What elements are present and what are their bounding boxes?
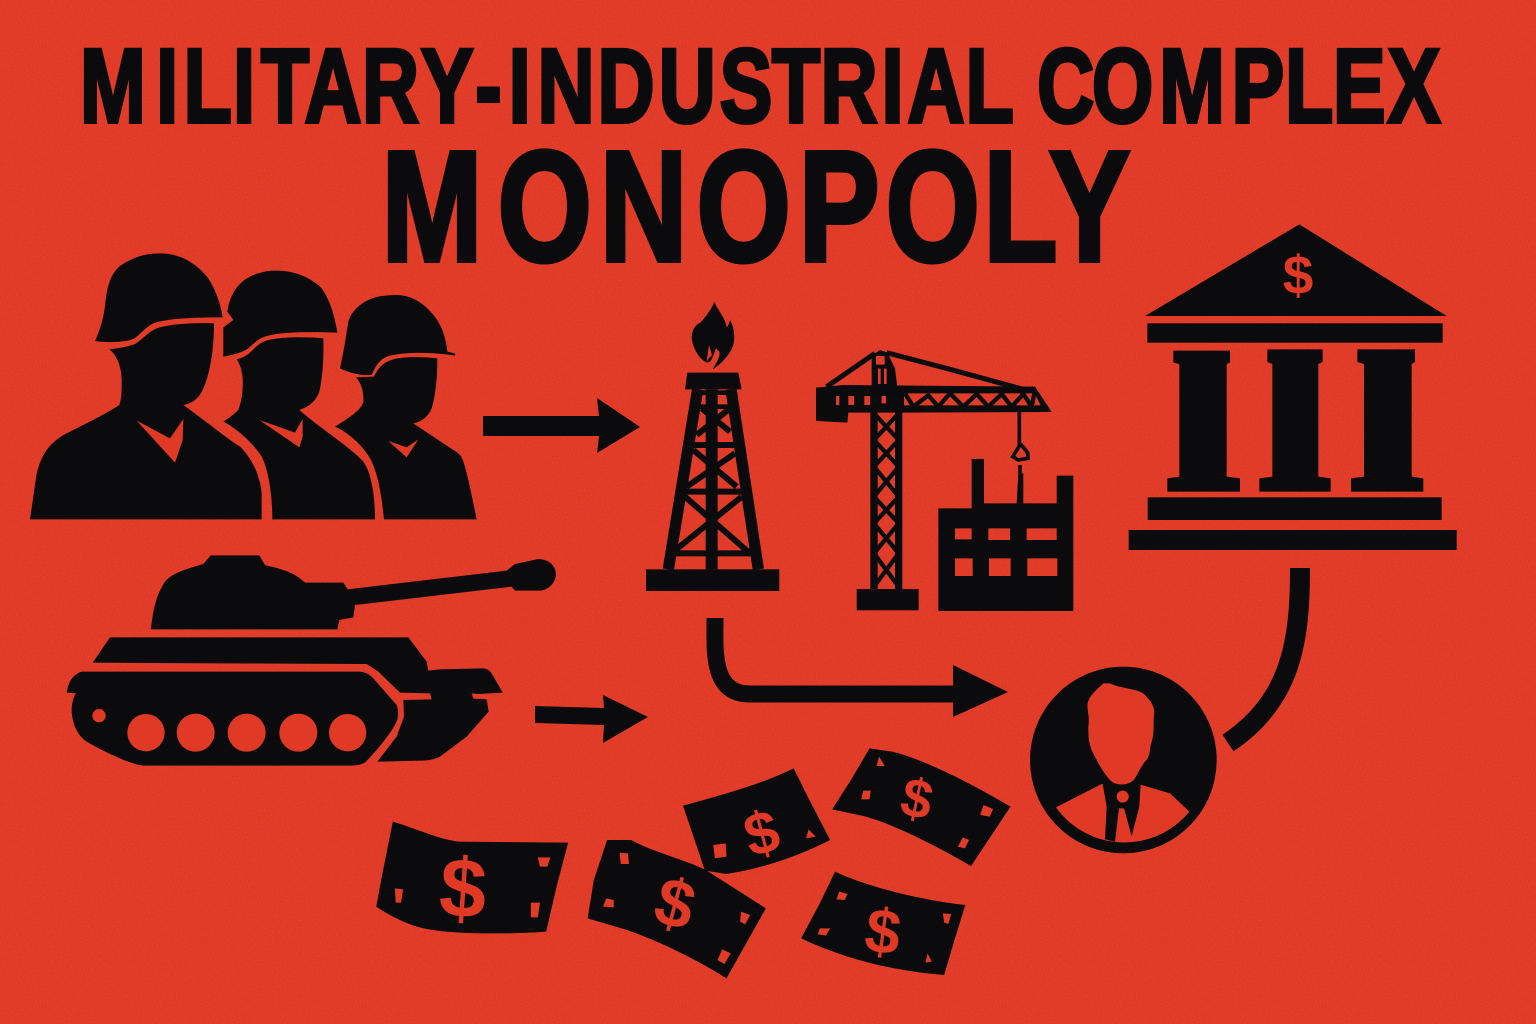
- banknote 2: $: [647, 862, 703, 945]
- bank pediment: [1145, 224, 1447, 316]
- derrick base: [646, 569, 779, 591]
- banknote 5: [801, 872, 965, 975]
- derrick cap: [685, 373, 742, 389]
- arrow: executive to bank: [1228, 568, 1300, 743]
- bank columns: [1167, 349, 1423, 492]
- heading: first line: MILITARY-INDUSTRIAL: [80, 27, 1014, 145]
- icon: executive portrait: [1030, 667, 1217, 853]
- arrow: soldiers to industry: [483, 398, 640, 453]
- money: scattered banknotes: [376, 748, 1010, 978]
- title: [80, 27, 1440, 294]
- portrait circle: [1030, 667, 1217, 853]
- tank hull: [93, 637, 503, 762]
- factory: [938, 459, 1073, 611]
- crane base: [857, 589, 919, 610]
- crane jib: [816, 385, 1052, 423]
- derrick frame: [668, 389, 758, 569]
- soldier back: [335, 295, 477, 519]
- soldier middle: [223, 271, 375, 519]
- banknote 2: [588, 840, 766, 978]
- icon: tower crane and factory: [816, 350, 1073, 611]
- icon: oil derrick: [646, 302, 779, 591]
- arrow: tank to industry: [535, 695, 648, 743]
- executive tie: [1103, 784, 1141, 842]
- banknote 3: [683, 768, 830, 874]
- banknote 4: [832, 748, 1010, 866]
- arrow: factory to executive: [715, 618, 1008, 717]
- crane tower: [874, 410, 899, 589]
- heading: first line: COMPLEX: [1037, 27, 1440, 145]
- soldier front: [30, 253, 262, 519]
- crane hook: [1013, 412, 1028, 473]
- banknote 1: [376, 822, 568, 937]
- bank entablature: [1147, 323, 1443, 343]
- tank turret and gun: [151, 555, 556, 629]
- heading: first line: [80, 27, 1440, 145]
- flame: [692, 302, 734, 369]
- banknote 3: $: [737, 797, 786, 870]
- banknote 1: $: [436, 840, 490, 937]
- crane mast and cables: [872, 350, 897, 387]
- executive suit: [1056, 784, 1189, 842]
- bank dollar sign: $: [1283, 244, 1313, 306]
- banknote 5: $: [861, 895, 905, 969]
- tie knot: [1117, 791, 1129, 803]
- tank wheels: [92, 709, 366, 752]
- icon: tank: [67, 555, 556, 766]
- tank tracks: [67, 672, 398, 766]
- icon: three soldiers: [30, 253, 477, 519]
- heading: MONOPOLY: MONOPOLY: [382, 118, 1130, 294]
- banknote 4: $: [896, 765, 938, 832]
- executive head: [1087, 683, 1154, 785]
- bank steps: [1129, 497, 1457, 550]
- icon: bank building: [1129, 224, 1457, 550]
